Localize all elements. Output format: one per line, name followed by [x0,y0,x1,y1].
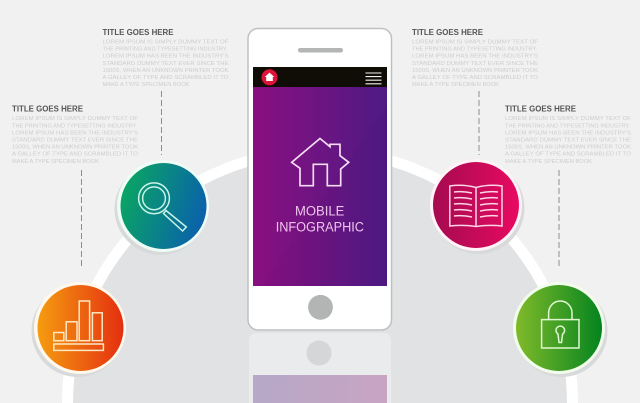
semicircle backdrop with white ring [62,145,578,403]
text block: middle left: LOREM IPSUM HAS BEEN THE INDUSTRY'S [12,130,138,136]
phone [248,28,392,330]
text block: middle right: LOREM IPSUM HAS BEEN THE INDUSTRY'S [505,130,631,136]
text block: top right: THE PRINTING AND TYPESETTING INDUSTRY. [412,47,537,53]
heading: mobile: MOBILE [295,204,344,219]
top bar [253,67,387,87]
icon: house [292,138,349,186]
icon: open book [450,185,502,226]
text block: middle right: A GALLEY OF TYPE AND SCRAMBLED IT TO [505,152,632,158]
semicircle inner fill [73,156,567,403]
home button [308,295,333,320]
text block: top left [102,28,229,88]
text block: top left: MAKE A TYPE SPECIMEN BOOK [102,82,190,88]
text block: top left: TITLE GOES HERE [102,28,174,37]
badge: book [430,159,524,254]
text block: middle right: TITLE GOES HERE [505,105,577,114]
menu icon [366,73,382,84]
text block: middle right: 1500S, WHEN AN UNKNOWN PRINTER TOOK [505,145,631,151]
connector: magnifier [160,91,162,155]
badge: bar chart [32,282,126,377]
text block: middle right: MAKE A TYPE SPECIMEN BOOK [505,159,592,165]
connector: chart [80,170,82,269]
text block: middle left [12,105,139,165]
text block: middle left: THE PRINTING AND TYPESETTING INDUSTRY. [12,123,137,129]
phone body [248,28,392,330]
text block: middle right: STANDARD DUMMY TEXT EVER SINCE THE [505,138,631,144]
text block: top right: LOREM IPSUM HAS BEEN THE INDUSTRY'S [412,54,538,60]
text block: top right [412,28,539,88]
text block: top left: LOREM IPSUM IS SIMPLY DUMMY TEXT OF [102,40,229,46]
text block: middle left: STANDARD DUMMY TEXT EVER SINCE THE [12,138,138,144]
text block: top right: 1500S, WHEN AN UNKNOWN PRINTER TOOK [412,68,538,74]
heading: infographic: INFOGRAPHIC [276,220,364,235]
icon: magnifier [139,183,186,231]
text block: middle left: A GALLEY OF TYPE AND SCRAMBLED IT TO [12,152,139,158]
text block: middle left: 1500S, WHEN AN UNKNOWN PRINTER TOOK [12,145,138,151]
text block: top right: MAKE A TYPE SPECIMEN BOOK [412,82,499,88]
phone reflection [249,333,391,403]
home badge [262,69,278,85]
text block: top left: LOREM IPSUM HAS BEEN THE INDUSTRY'S [102,54,229,60]
badge: magnifier [114,160,209,255]
text block: middle right [505,105,632,165]
text block: middle left: LOREM IPSUM IS SIMPLY DUMMY TEXT OF [12,116,139,122]
text block: top right: STANDARD DUMMY TEXT EVER SINCE THE [412,61,538,67]
connector: padlock [558,170,560,269]
text block: top left: STANDARD DUMMY TEXT EVER SINCE THE [102,61,229,67]
screen [253,87,387,286]
text block: top left: THE PRINTING AND TYPESETTING INDUSTRY. [102,47,228,53]
icon: padlock [542,301,579,348]
text block: top right: A GALLEY OF TYPE AND SCRAMBLED IT TO [412,75,539,81]
connector: book [478,91,480,155]
text block: middle right: LOREM IPSUM IS SIMPLY DUMMY TEXT OF [505,116,632,122]
text block: top left: A GALLEY OF TYPE AND SCRAMBLED IT TO [102,75,229,81]
icon: bar chart [54,301,103,350]
text block: top left: 1500S, WHEN AN UNKNOWN PRINTER TOOK [102,68,229,74]
text block: top right: LOREM IPSUM IS SIMPLY DUMMY TEXT OF [412,40,539,46]
speaker [298,48,343,52]
text block: middle left: MAKE A TYPE SPECIMEN BOOK [12,159,99,165]
badge: padlock [513,282,608,377]
text block: middle right: THE PRINTING AND TYPESETTING INDUSTRY. [505,123,630,129]
text block: middle left: TITLE GOES HERE [12,105,84,114]
text block: top right: TITLE GOES HERE [412,28,484,37]
screen sheen [262,105,387,286]
